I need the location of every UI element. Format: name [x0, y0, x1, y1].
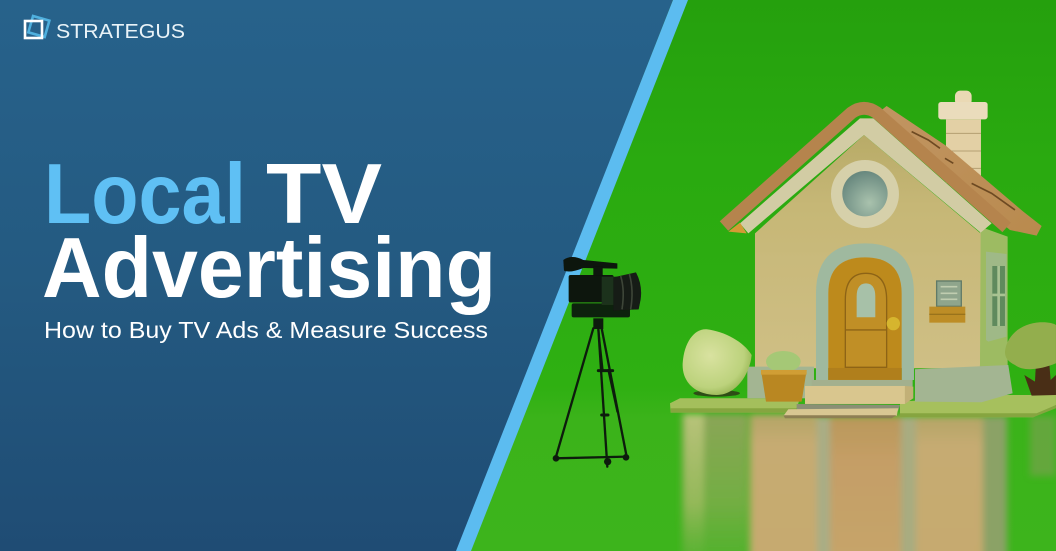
- light blue diagonal stripe: [456, 0, 688, 551]
- viewfinder and handle: [563, 257, 617, 272]
- floor reflection of house: [682, 414, 1056, 551]
- logo wordmark: STRATEGUS: [56, 20, 185, 43]
- illustration: house: [670, 91, 1056, 418]
- round window: [831, 160, 899, 228]
- right tree: [1005, 322, 1056, 396]
- chimney: [938, 91, 988, 183]
- lawn base: [670, 395, 1056, 418]
- potted plant: [761, 351, 807, 402]
- roof edge: [724, 108, 1007, 227]
- side window: [986, 252, 1007, 342]
- tripod: [556, 328, 627, 467]
- title line: Advertising: Advertising: [42, 221, 496, 316]
- title word: Local: Local: [44, 147, 246, 242]
- door with arch: [816, 243, 914, 380]
- title word: TV: TV: [266, 147, 382, 242]
- left bush: [683, 329, 752, 397]
- subtitle: How to Buy TV Ads & Measure Success: [44, 317, 488, 343]
- small vent window and sill: [929, 281, 965, 323]
- base stones: [747, 365, 1013, 402]
- icon: video camera on tripod: [553, 257, 641, 467]
- panel: navy title panel: [0, 0, 673, 551]
- camera body: [572, 303, 630, 317]
- front wall: [755, 135, 981, 368]
- logo: Strategus: [25, 16, 185, 43]
- title: [42, 147, 496, 316]
- side wall: [980, 227, 1008, 368]
- icon: logo squares: [25, 16, 49, 38]
- steps: [805, 380, 913, 404]
- roof right plane: [873, 106, 1042, 236]
- fascia under roof: [740, 118, 992, 233]
